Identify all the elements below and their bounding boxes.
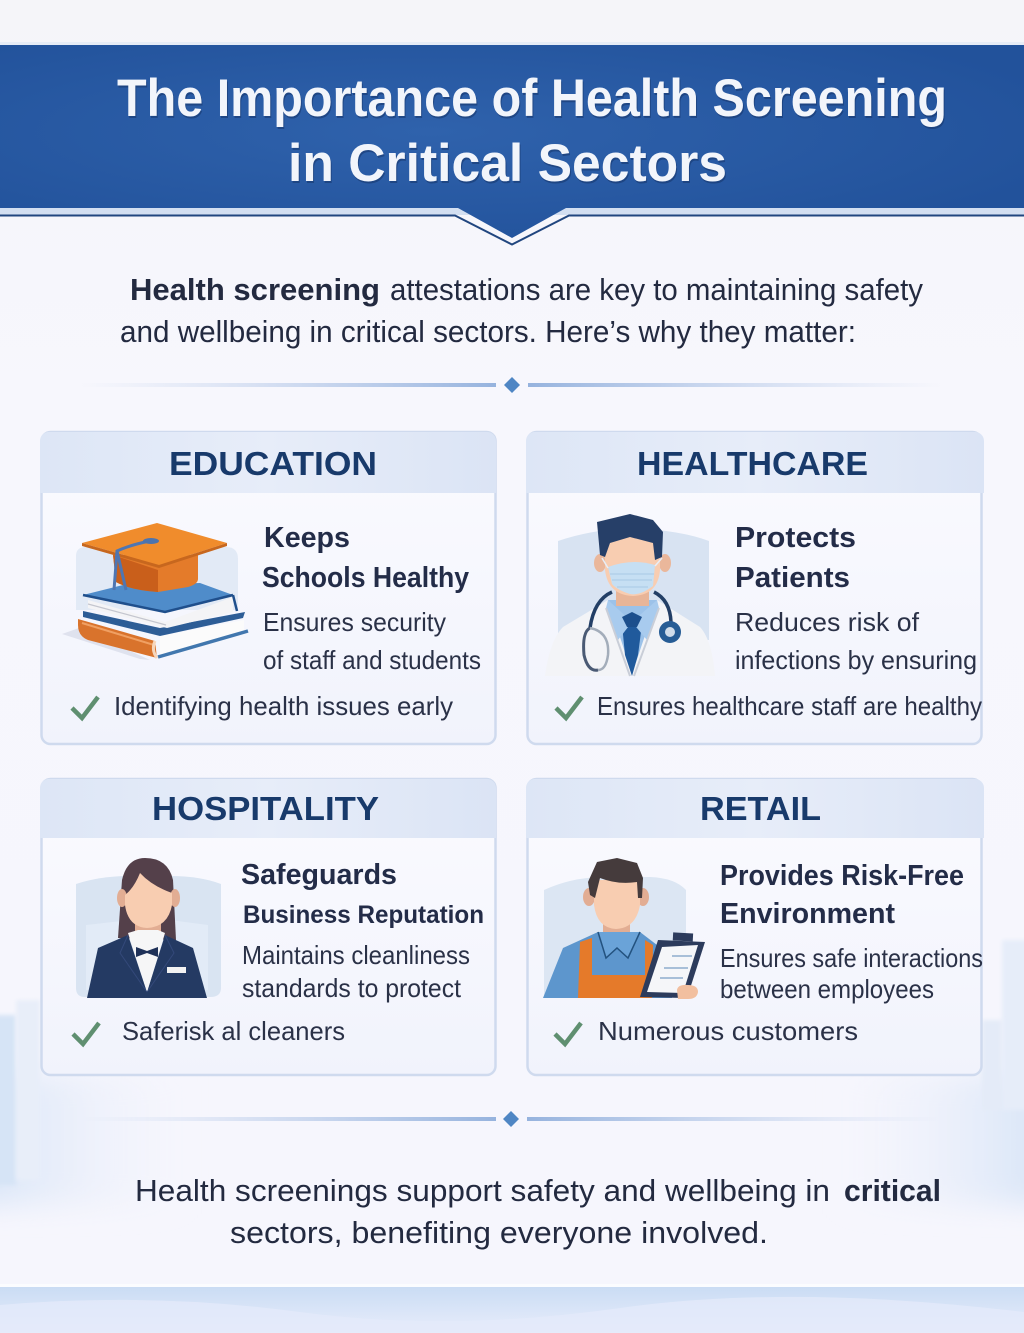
education heading: Schools Healthy (262, 562, 469, 594)
healthcare heading (735, 522, 856, 594)
hospitality description: Maintains cleanliness (242, 940, 470, 970)
education check item: Identifying health issues early (114, 691, 453, 721)
panel: healthcare (526, 432, 984, 744)
education header: EDUCATION (169, 445, 377, 482)
closing statement: critical (844, 1173, 941, 1208)
hospitality header: HOSPITALITY (152, 790, 379, 827)
icon: books and graduation cap (62, 523, 248, 660)
retail header (526, 779, 984, 838)
hospitality description (242, 940, 470, 1003)
hospitality heading: Business Reputation (243, 901, 484, 929)
retail heading (720, 860, 964, 930)
retail description (720, 943, 983, 1004)
retail description: between employees (720, 974, 934, 1004)
title text: in Critical Sectors (289, 136, 728, 195)
healthcare description (735, 607, 977, 675)
healthcare check item: Ensures healthcare staff are healthy (597, 691, 982, 721)
education header (40, 432, 496, 493)
healthcare description: Reduces risk of (735, 607, 920, 637)
closing statement: sectors, benefiting everyone involved. (230, 1215, 768, 1250)
education description (263, 607, 481, 675)
divider bottom (80, 1111, 941, 1127)
closing statement: Health screenings support safety and wellbeing in (135, 1173, 830, 1208)
education heading: Keeps (264, 522, 350, 554)
hospitality heading: Safeguards (241, 859, 397, 891)
panel: hospitality (40, 779, 496, 1075)
panel: retail (526, 779, 984, 1075)
title text: The Importance of Health Screening (117, 69, 947, 128)
healthcare header: HEALTHCARE (637, 445, 868, 482)
intro paragraph: Health screening (130, 272, 380, 307)
icon: retail worker with clipboard (543, 858, 705, 999)
retail check item: Numerous customers (598, 1016, 858, 1046)
healthcare header (526, 432, 984, 493)
healthcare heading: Patients (735, 562, 850, 594)
education heading (262, 522, 469, 594)
hospitality check item: Saferisk al cleaners (122, 1016, 345, 1046)
icon: hospitality staff (76, 858, 221, 998)
intro paragraph: attestations are key to maintaining safety (390, 272, 923, 307)
bottom footer band (0, 1284, 1024, 1333)
title text: The Importance of Health Screening (118, 71, 948, 130)
title text: in Critical Sectors (288, 134, 727, 193)
divider top (80, 377, 942, 393)
hospitality header (40, 779, 496, 838)
background cityscape: left and right (0, 940, 1024, 1205)
retail description: Ensures safe interactions (720, 943, 983, 973)
icon: doctor with mask (545, 514, 715, 676)
intro paragraph: and wellbeing in critical sectors. Here’s why they matter: (120, 314, 856, 349)
intro paragraph (120, 272, 923, 349)
healthcare description: infections by ensuring (735, 645, 977, 675)
hospitality heading (241, 859, 484, 929)
title banner (0, 42, 1024, 244)
retail heading: Provides Risk-Free (720, 860, 964, 892)
retail header: RETAIL (700, 790, 821, 827)
title text (117, 69, 948, 195)
retail heading: Environment (720, 898, 895, 930)
education description: Ensures security (263, 607, 446, 637)
hospitality description: standards to protect (242, 973, 462, 1003)
education description: of staff and students (263, 645, 481, 675)
closing statement (135, 1173, 941, 1250)
healthcare heading: Protects (735, 522, 856, 554)
panel: education (40, 432, 496, 744)
